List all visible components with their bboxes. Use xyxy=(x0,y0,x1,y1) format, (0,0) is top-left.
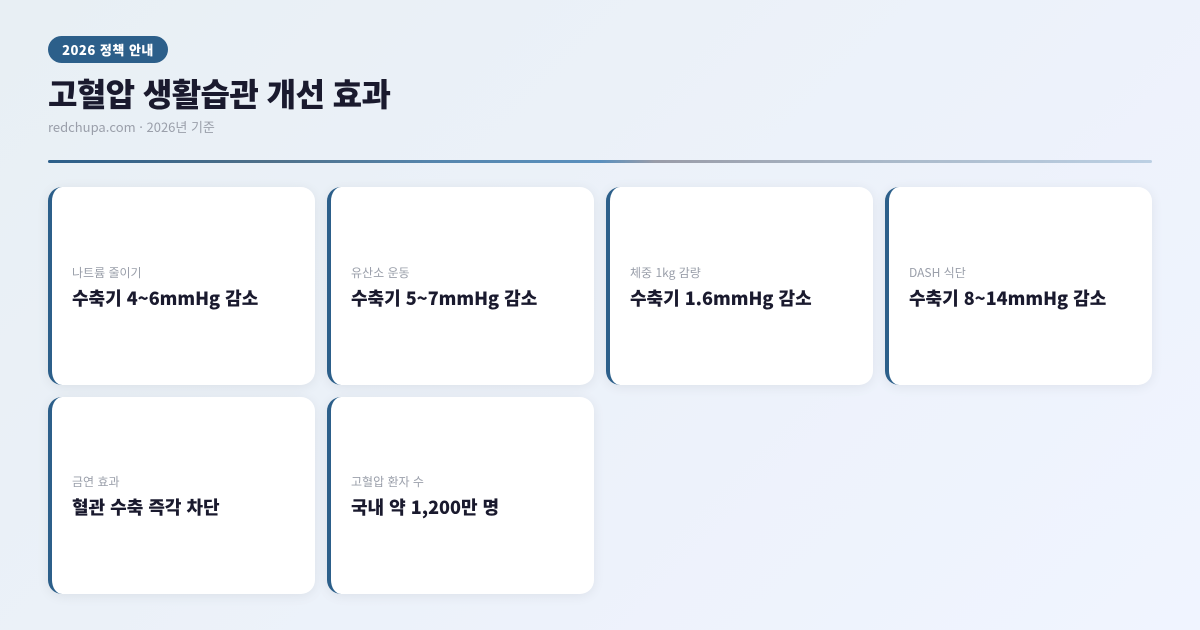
subtitle: redchupa.com · 2026년 기준 xyxy=(48,117,215,136)
card: weight loss: 수축기 1.6mmHg 감소 xyxy=(630,285,812,311)
card: weight loss xyxy=(606,187,873,385)
card: aerobic exercise: 유산소 운동 xyxy=(351,264,410,281)
card: DASH diet: DASH 식단 xyxy=(909,264,966,281)
card: sodium reduction xyxy=(48,187,315,385)
card: sodium reduction: 나트륨 줄이기 xyxy=(72,264,142,281)
badge xyxy=(48,36,168,63)
card: weight loss: 체중 1kg 감량 xyxy=(630,264,701,281)
card: DASH diet: 수축기 8~14mmHg 감소 xyxy=(909,285,1106,311)
card: aerobic exercise xyxy=(327,187,594,385)
card: quitting smoking xyxy=(48,397,315,594)
card: DASH diet xyxy=(885,187,1152,385)
card: aerobic exercise: 수축기 5~7mmHg 감소 xyxy=(351,285,537,311)
gradient divider xyxy=(48,160,1152,163)
card: quitting smoking: 혈관 수축 즉각 차단 xyxy=(72,494,220,520)
title: 고혈압 생활습관 개선 효과 xyxy=(48,70,390,116)
card: sodium reduction: 수축기 4~6mmHg 감소 xyxy=(72,285,258,311)
badge: 2026 정책 안내 xyxy=(62,40,154,59)
card: hypertension patients: 국내 약 1,200만 명 xyxy=(351,494,499,520)
card: quitting smoking: 금연 효과 xyxy=(72,473,120,490)
card: hypertension patients xyxy=(327,397,594,594)
card: hypertension patients: 고혈압 환자 수 xyxy=(351,473,424,490)
